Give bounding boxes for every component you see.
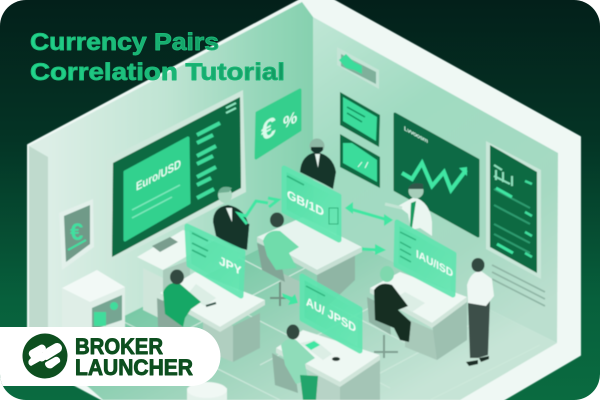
arrow: GB/1D to IAU/ISD: [345, 202, 393, 226]
chair: AU operator: [272, 353, 298, 393]
floor: [86, 236, 556, 400]
chair: IAU operator: [367, 297, 398, 358]
person: standing man: [466, 258, 494, 366]
desk with AU/JPSD workstation: [276, 330, 380, 400]
logo emblem: [22, 334, 68, 378]
arrow: presenter to GB/1D: [239, 198, 278, 224]
arrow: JPY to AU/JPSD: [282, 293, 298, 305]
brand name: LAUNCHER: [75, 355, 193, 380]
arrow: desk to IAU/ISD: [362, 244, 386, 255]
euro wall plaque: €: [70, 219, 83, 246]
brand name: [75, 334, 193, 380]
person: presenter left: [213, 187, 249, 250]
glass panel: IAU/ISD: [396, 222, 454, 295]
data bars: [197, 123, 220, 198]
left wall: [29, 2, 313, 353]
chair: JPY operator: [157, 298, 182, 328]
floor device: [187, 382, 227, 400]
glass panel: IAU/ISD: IAU/ISD: [416, 247, 453, 280]
back desk: [137, 230, 190, 318]
glass panel: GB/1D: GB/1D: [287, 187, 324, 219]
Euro/USD card: Euro/USD: [136, 156, 181, 194]
glass panel: AU/JPSD: AU/ JPSD: [306, 294, 356, 335]
wall sign with arrow: [337, 47, 379, 89]
right wall: [313, 17, 558, 343]
rising zigzag line: [402, 163, 466, 190]
chair: GB operator: [257, 243, 290, 306]
person: JPY operator: [163, 270, 201, 327]
desk with IAU/ISD workstation: [370, 272, 467, 360]
printer box: [62, 270, 125, 330]
brand name: BROKER: [75, 334, 163, 359]
card: euro percent: €: [261, 111, 276, 149]
wall panel lower: [340, 134, 380, 188]
person: IAU operator: [374, 266, 411, 342]
person: presenter back: [300, 138, 336, 189]
title line 2: Correlation Tutorial: [30, 59, 285, 86]
title line 1: Currency Pairs: [30, 29, 219, 56]
person: GB operator: [263, 212, 299, 270]
logo pill: [0, 327, 220, 386]
chart panel: [395, 114, 478, 236]
monitor: Euro/USD: [106, 90, 246, 264]
person: AU operator: [281, 324, 318, 400]
glass panel: AU/JPSD: [302, 276, 360, 351]
Euro/USD card: [125, 138, 189, 240]
wall panel upper: [340, 92, 380, 147]
person: presenter right: [385, 183, 432, 236]
euro wall plaque: [59, 199, 94, 270]
desk with GB/1D workstation: [256, 220, 363, 306]
chart title: Lvvoosm: [404, 125, 428, 145]
desk with JPY workstation: [160, 272, 265, 362]
glass panel: JPY: [187, 226, 243, 296]
glass panel: JPY: JPY: [219, 253, 242, 278]
wall text lines: [492, 265, 545, 306]
title: [30, 29, 285, 86]
glass panel: GB/1D: [284, 168, 339, 240]
card: euro percent: %: [283, 107, 297, 133]
left wall edge: [29, 146, 48, 345]
card: euro percent: [256, 90, 300, 158]
list panel: [486, 141, 541, 279]
